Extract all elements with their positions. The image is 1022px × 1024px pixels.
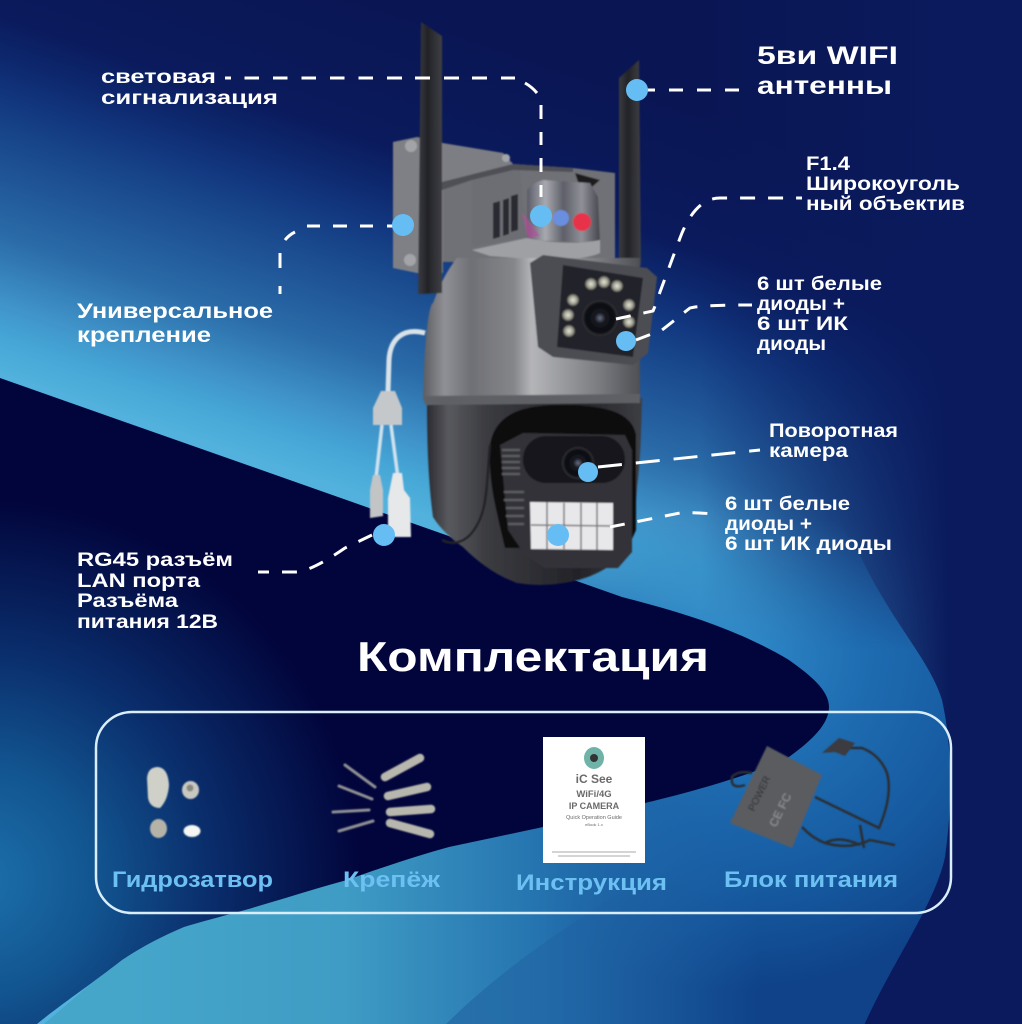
item: manual: eBook 1.x xyxy=(585,822,603,827)
label: rotating camera: Поворотная xyxy=(769,421,898,442)
caption: fasteners: Крепёж xyxy=(343,867,440,892)
warning light dome xyxy=(472,180,600,259)
lower dome xyxy=(427,398,642,585)
left antenna xyxy=(418,22,442,294)
callout marker dots xyxy=(373,79,648,546)
label: connectors: питания 12В xyxy=(77,612,218,633)
label: lower diodes: 6 шт белые xyxy=(725,494,850,515)
label: connectors: Разъёма xyxy=(77,591,179,612)
label: light alarm: световая xyxy=(101,67,216,88)
lower camera module xyxy=(500,433,632,568)
item: manual: Quick Operation Guide xyxy=(566,815,622,821)
label: wide-angle lens: ный объектив xyxy=(806,194,965,215)
panel: package contents xyxy=(96,712,951,913)
item: manual: iC See xyxy=(576,772,613,786)
label: connectors: LAN порта xyxy=(77,571,201,592)
label: universal mount: крепление xyxy=(77,324,211,347)
label: lower diodes: диоды + xyxy=(725,514,812,535)
item: power adapter: CE FC xyxy=(766,791,795,829)
label: lower diodes: 6 шт ИК диоды xyxy=(725,534,892,555)
heading: package contents: Комплектация xyxy=(357,633,709,680)
label: WiFi antennas: антенны xyxy=(757,72,892,100)
power and LAN cable xyxy=(370,332,425,537)
label: wide-angle lens: F1.4 xyxy=(806,154,850,175)
right antenna xyxy=(619,60,641,265)
upper camera module xyxy=(530,255,657,365)
item: fasteners xyxy=(333,758,440,892)
caption: manual: Инструкция xyxy=(516,870,667,895)
label: upper diodes: диоды + xyxy=(757,294,845,315)
wall mount bracket xyxy=(393,137,615,273)
item: power adapter xyxy=(724,738,898,892)
upper housing xyxy=(423,258,640,400)
label: light alarm: сигнализация xyxy=(101,88,278,109)
label: universal mount: Универсальное xyxy=(77,300,273,323)
item: manual: WiFi/4G xyxy=(576,789,612,800)
label: WiFi antennas: 5ви WIFI xyxy=(757,42,898,70)
item: manual xyxy=(516,737,667,895)
label: wide-angle lens: Широкоуголь xyxy=(806,174,960,195)
label: upper diodes: 6 шт ИК xyxy=(757,314,848,335)
label: upper diodes: 6 шт белые xyxy=(757,274,882,295)
caption: seal: Гидрозатвор xyxy=(112,867,273,892)
dome lip xyxy=(423,394,640,405)
item: power adapter: POWER xyxy=(747,775,773,813)
camera illustration xyxy=(370,22,657,585)
callout connector lines xyxy=(225,78,802,572)
label: upper diodes: диоды xyxy=(757,334,826,355)
item: waterproof seal xyxy=(112,767,273,892)
caption: power adapter: Блок питания xyxy=(724,867,898,892)
dome inner groove xyxy=(442,445,490,543)
label: connectors: RG45 разъём xyxy=(77,550,233,571)
lower camera recess xyxy=(490,405,636,548)
label: rotating camera: камера xyxy=(769,441,849,462)
item: manual: IP CAMERA xyxy=(569,801,620,811)
